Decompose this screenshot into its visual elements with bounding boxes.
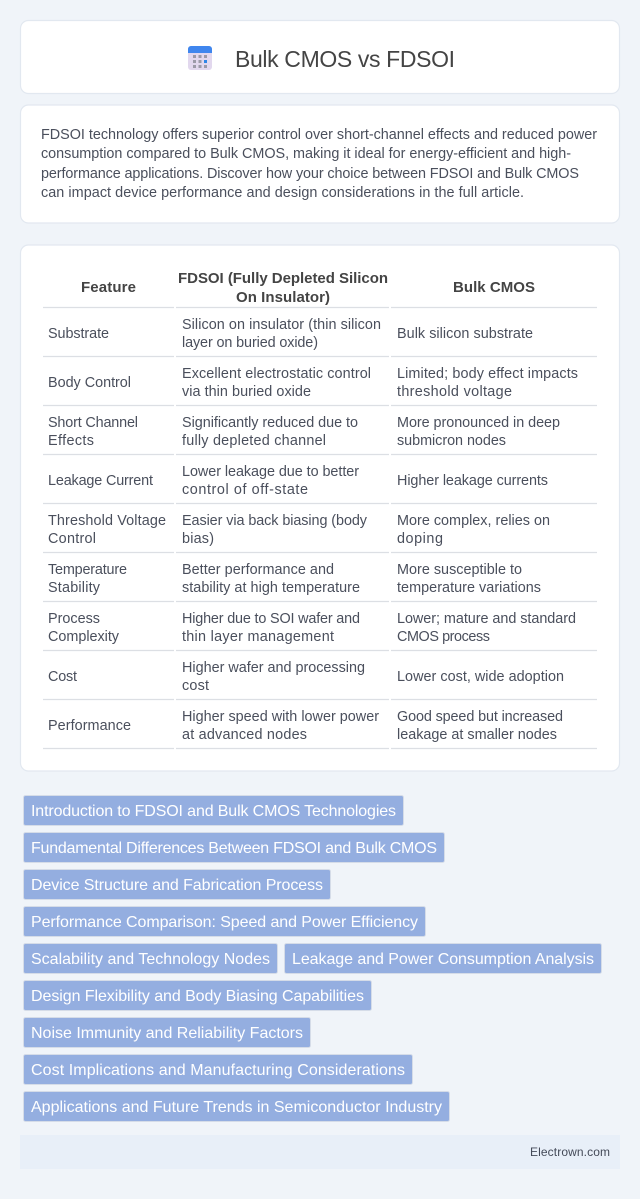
tag: performance comparison: Performance Comparison: Speed and Power Efficiency: [31, 914, 418, 931]
tag: leakage and power: Leakage and Power Consumption Analysis: [292, 951, 594, 968]
row: Short Channel Effects: fully depleted channel: [182, 433, 326, 449]
row: Process Complexity: CMOS process: [397, 629, 490, 645]
row: Temperature Stability: Stability: [48, 580, 101, 596]
tag list: article sections: [24, 796, 602, 1122]
row: Threshold Voltage Control: bias): [182, 531, 214, 547]
row: Leakage Current: [43, 464, 597, 504]
row: Threshold Voltage Control: Easier via back biasing (body: [182, 513, 368, 529]
tag: scalability: [24, 944, 278, 974]
tag: noise immunity: [24, 1018, 310, 1048]
row: Cost: Lower cost, wide adoption: [397, 669, 564, 685]
row: Performance: Higher speed with lower power: [182, 709, 379, 725]
tag: design flexibility: [24, 980, 372, 1010]
row: Threshold Voltage Control: [43, 513, 597, 552]
row: Temperature Stability: Better performance and: [182, 562, 334, 578]
icon: calendar: [188, 46, 212, 70]
tag: fundamental differences: [24, 832, 444, 862]
row: Leakage Current: Higher leakage currents: [397, 473, 548, 489]
panel: comparison table: [20, 245, 620, 771]
footer: Electrown.com: [530, 1145, 610, 1159]
row: Process Complexity: thin layer management: [182, 629, 334, 645]
row: Leakage Current: control of off-state: [182, 482, 308, 498]
tag: design flexibility: Design Flexibility and Body Biasing Capabilities: [31, 988, 364, 1005]
row: Cost: Higher wafer and processing: [182, 660, 365, 676]
row: Threshold Voltage Control: Control: [48, 531, 96, 547]
panel: introduction: [20, 105, 620, 223]
tag: cost implications: [24, 1054, 412, 1084]
row: Process Complexity: Process: [48, 611, 100, 627]
row: Leakage Current: Lower leakage due to better: [182, 464, 359, 480]
row: Process Complexity: [43, 611, 597, 650]
tag: introduction: Introduction to FDSOI and Bulk CMOS Technologies: [31, 803, 396, 820]
row: Substrate: [43, 317, 597, 356]
tag: fundamental differences: Fundamental Differences Between FDSOI and Bulk CMOS: [31, 840, 437, 857]
row: Body Control: Limited; body effect impacts: [397, 366, 578, 382]
tag: introduction: [24, 796, 404, 826]
row: Performance: Good speed but increased: [397, 709, 563, 725]
row: Body Control: Excellent electrostatic control: [182, 366, 371, 382]
row: Temperature Stability: More susceptible to: [397, 562, 522, 578]
tag: performance comparison: [24, 906, 426, 936]
row: Process Complexity: Higher due to SOI wafer and: [182, 611, 360, 627]
row: Threshold Voltage Control: Threshold Voltage: [48, 513, 166, 529]
tag: noise immunity: Noise Immunity and Reliability Factors: [31, 1025, 303, 1042]
text block: introduction paragraph: consumption compared to Bulk CMOS, making it ideal for energy-efficient and high-: [41, 146, 571, 162]
row: Substrate: Substrate: [48, 326, 109, 342]
row: Performance: Performance: [48, 718, 131, 734]
text block: introduction paragraph: can impact device performance and design considerations in the full article.: [41, 185, 524, 201]
table header: On Insulator): [236, 289, 330, 306]
row: Cost: [43, 660, 597, 700]
row: Short Channel Effects: [43, 415, 597, 454]
row: Substrate: layer on buried oxide): [182, 335, 318, 351]
table header: Bulk CMOS: [453, 279, 535, 296]
row: Short Channel Effects: Short Channel: [48, 415, 138, 431]
tag: leakage and power: [284, 944, 602, 974]
tag: cost implications: Cost Implications and Manufacturing Considerations: [31, 1062, 405, 1079]
row: Cost: cost: [182, 678, 209, 694]
row: Temperature Stability: stability at high temperature: [182, 580, 360, 596]
row: Short Channel Effects: Significantly reduced due to: [182, 415, 358, 431]
row: Process Complexity: Complexity: [48, 629, 120, 645]
row: Body Control: threshold voltage: [397, 384, 512, 400]
tag: device structure: Device Structure and Fabrication Process: [31, 877, 323, 894]
row: Threshold Voltage Control: More complex, relies on: [397, 513, 550, 529]
row: Body Control: Body Control: [48, 375, 131, 391]
row: Body Control: via thin buried oxide: [182, 384, 311, 400]
tag: scalability: Scalability and Technology Nodes: [31, 951, 270, 968]
row: Temperature Stability: temperature variations: [397, 580, 541, 596]
row: Substrate: Silicon on insulator (thin silicon: [182, 317, 381, 333]
row: Temperature Stability: [43, 562, 597, 602]
tag: device structure: [24, 870, 330, 900]
row: Cost: Cost: [48, 669, 77, 685]
tag: applications and trends: [24, 1092, 450, 1122]
row: Short Channel Effects: More pronounced in deep: [397, 415, 560, 431]
table header: Feature: [81, 279, 136, 296]
row: Substrate: Bulk silicon substrate: [397, 326, 533, 342]
row: Performance: leakage at smaller nodes: [397, 727, 557, 743]
table header: FDSOI (Fully Depleted Silicon: [178, 270, 388, 287]
row: Short Channel Effects: Effects: [48, 433, 94, 449]
text block: introduction paragraph: [41, 127, 597, 201]
tag: applications and trends: Applications and Future Trends in Semiconductor Industry: [31, 1099, 442, 1116]
row: Performance: at advanced nodes: [182, 727, 307, 743]
row: Performance: [43, 709, 597, 748]
table header: [43, 270, 597, 308]
row: Process Complexity: Lower; mature and standard: [397, 611, 576, 627]
row: Body Control: [43, 366, 597, 406]
text block: introduction paragraph: performance applications. Discover how your choice between FDSOI and Bulk CMOS: [41, 166, 579, 182]
row: Leakage Current: Leakage Current: [48, 473, 153, 489]
title: Bulk CMOS vs FDSOI: [235, 46, 455, 72]
text block: introduction paragraph: FDSOI technology offers superior control over short-channel effects and reduced power: [41, 127, 597, 143]
panel: header: [20, 20, 620, 94]
footer: [20, 1135, 620, 1169]
row: Short Channel Effects: submicron nodes: [397, 433, 506, 449]
row: Threshold Voltage Control: doping: [397, 531, 443, 547]
row: Temperature Stability: Temperature: [48, 562, 127, 578]
